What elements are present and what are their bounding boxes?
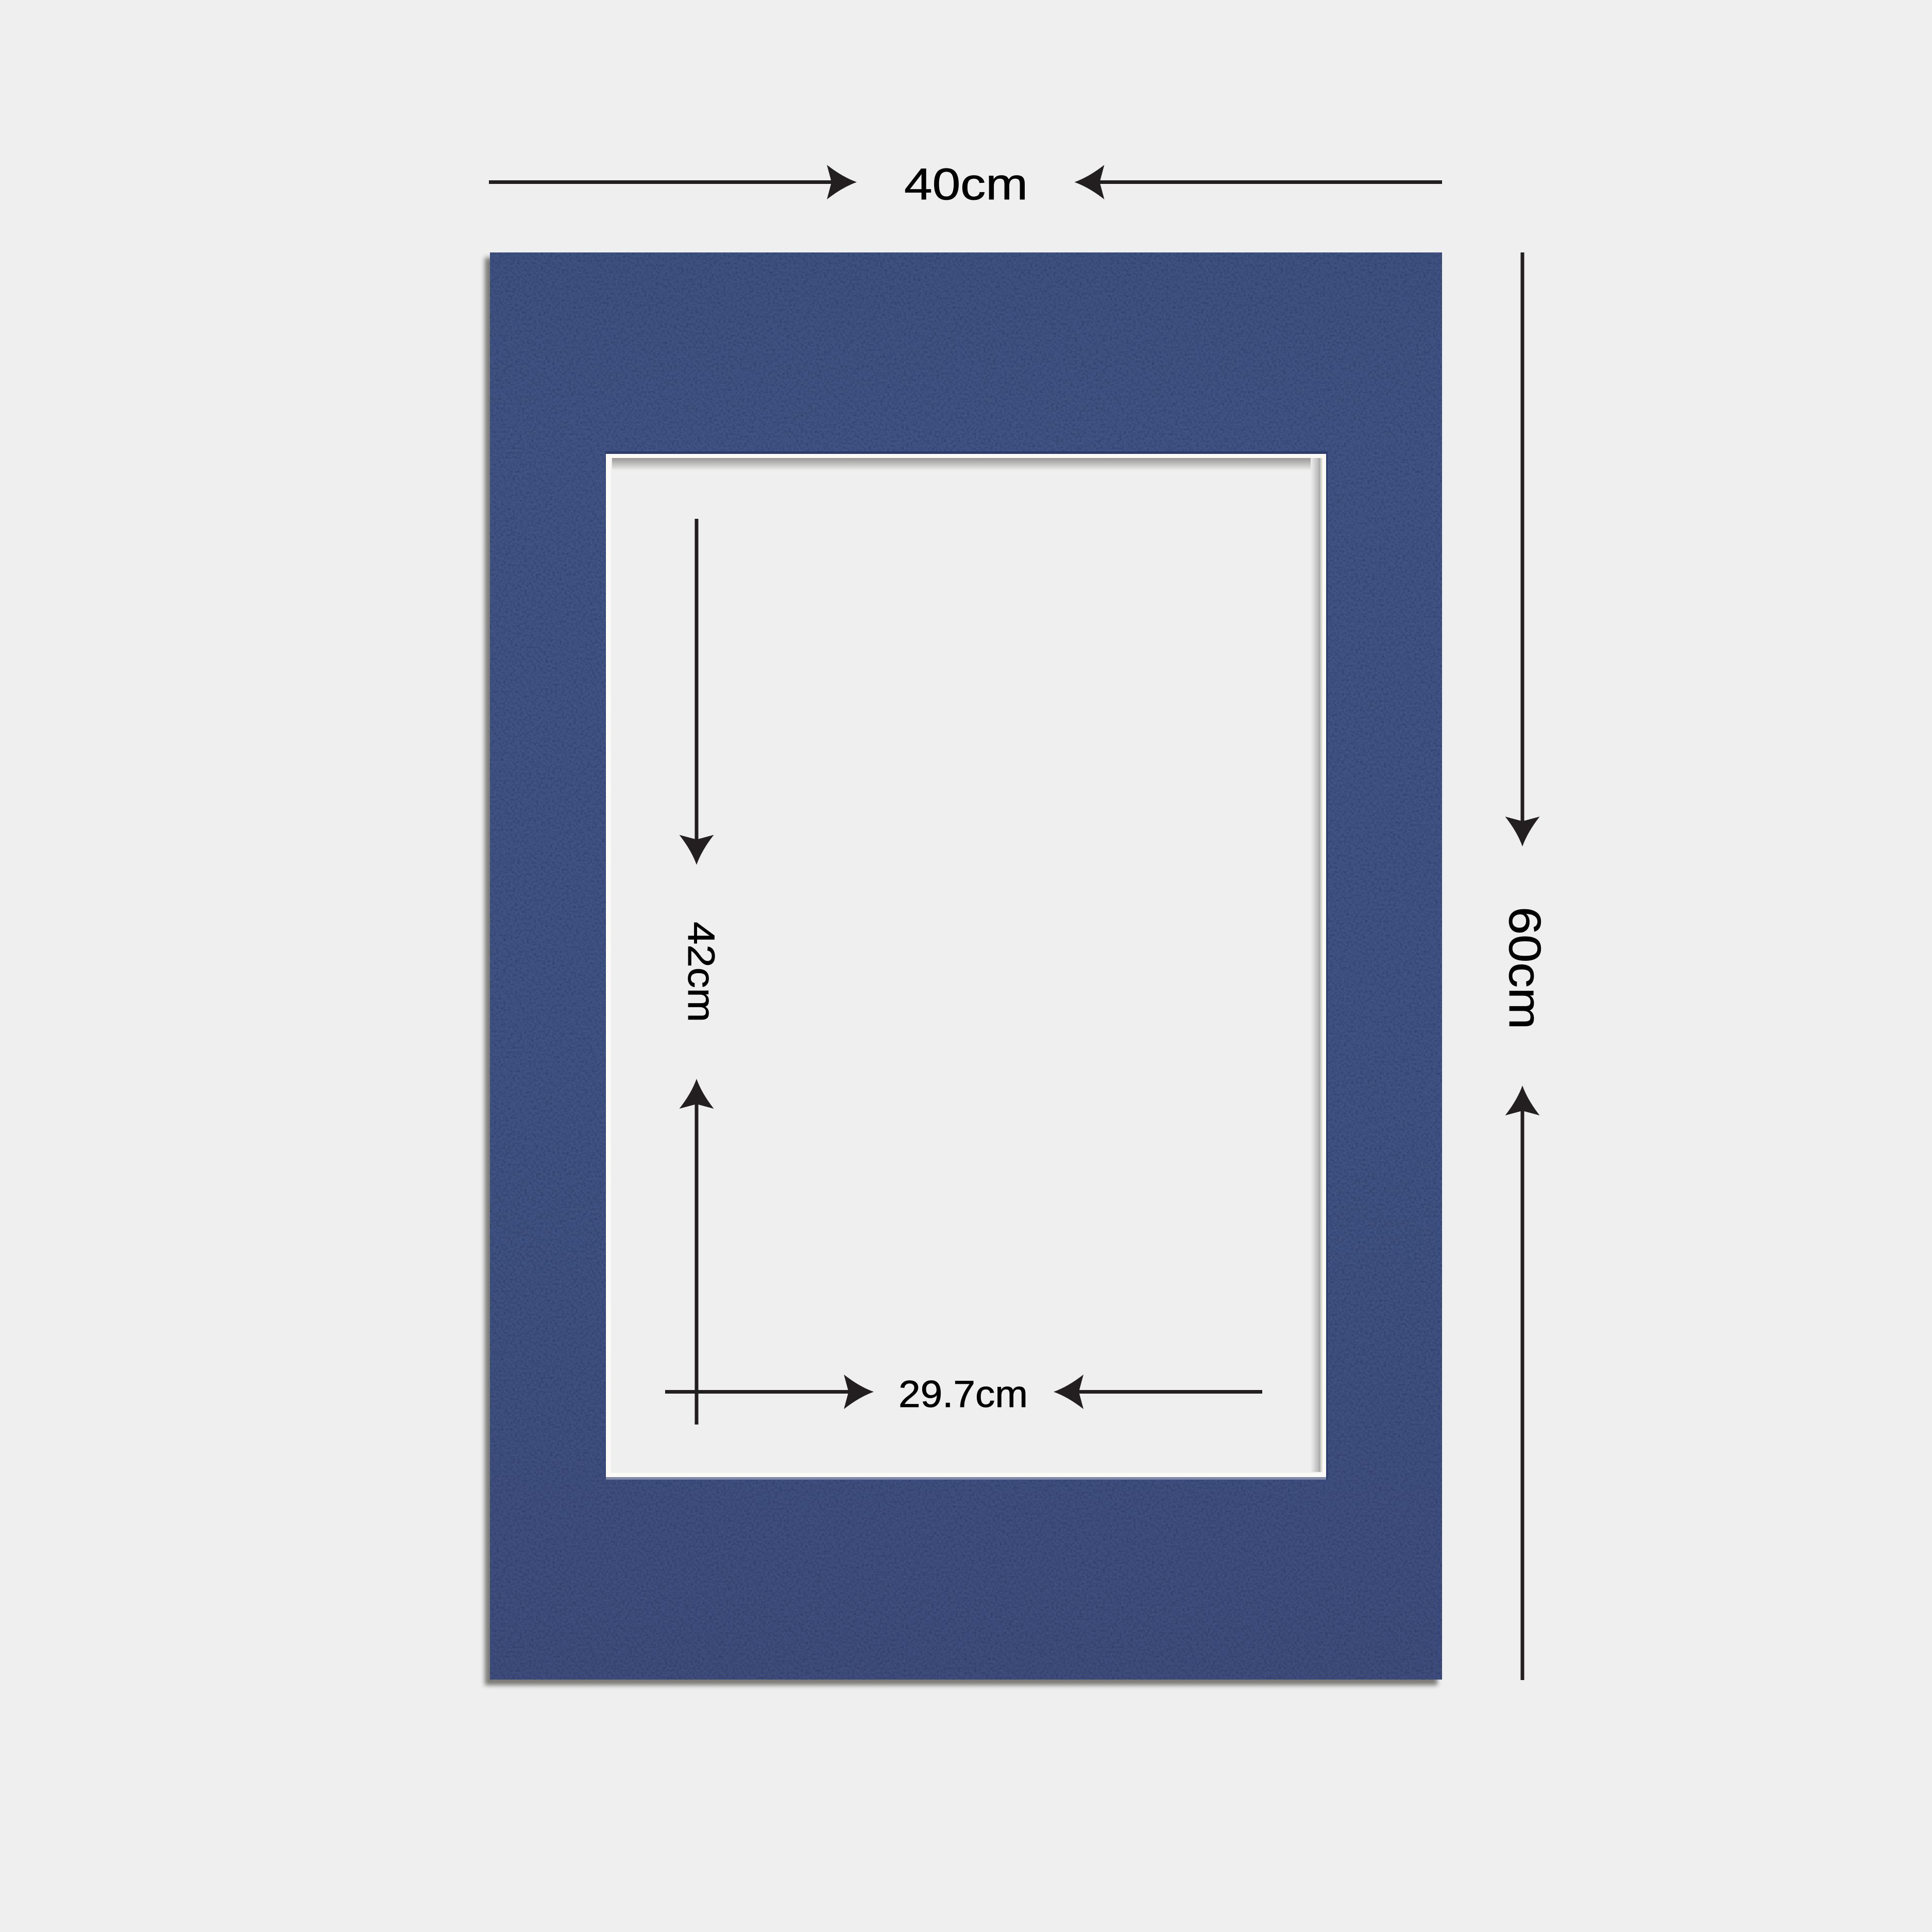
label: window height 42cm: 42cm (680, 922, 722, 1022)
arrow: window height, bottom (679, 1079, 714, 1425)
arrow: outer width, right (1075, 165, 1442, 199)
window right inner shadow (1311, 458, 1320, 1472)
arrow: window width, right (1054, 1375, 1262, 1409)
panel: navy mount board with cut-out window (485, 252, 1442, 1685)
window white bevel (606, 454, 1326, 1477)
arrow: window height, top (679, 519, 714, 865)
arrow: outer height, top (1505, 252, 1539, 846)
window top inner shadow (612, 458, 1322, 470)
board drop shadow (485, 258, 1437, 1685)
window opening (611, 458, 1322, 1473)
arrow: window width, left (665, 1375, 874, 1409)
window outer cut edge (605, 451, 1328, 1480)
arrow: outer width, left (489, 165, 857, 199)
window right bevel edge tint (1320, 458, 1322, 1472)
label: outer width 40cm: 40cm (904, 160, 1028, 209)
board surface (490, 252, 1442, 1680)
window lower edge highlight (606, 1477, 1326, 1480)
label: outer height 60cm: 60cm (1500, 907, 1550, 1029)
arrow: outer height, bottom (1505, 1086, 1539, 1680)
board paper texture (490, 252, 1442, 1680)
label: window width 29.7cm: 29.7cm (899, 1374, 1028, 1415)
